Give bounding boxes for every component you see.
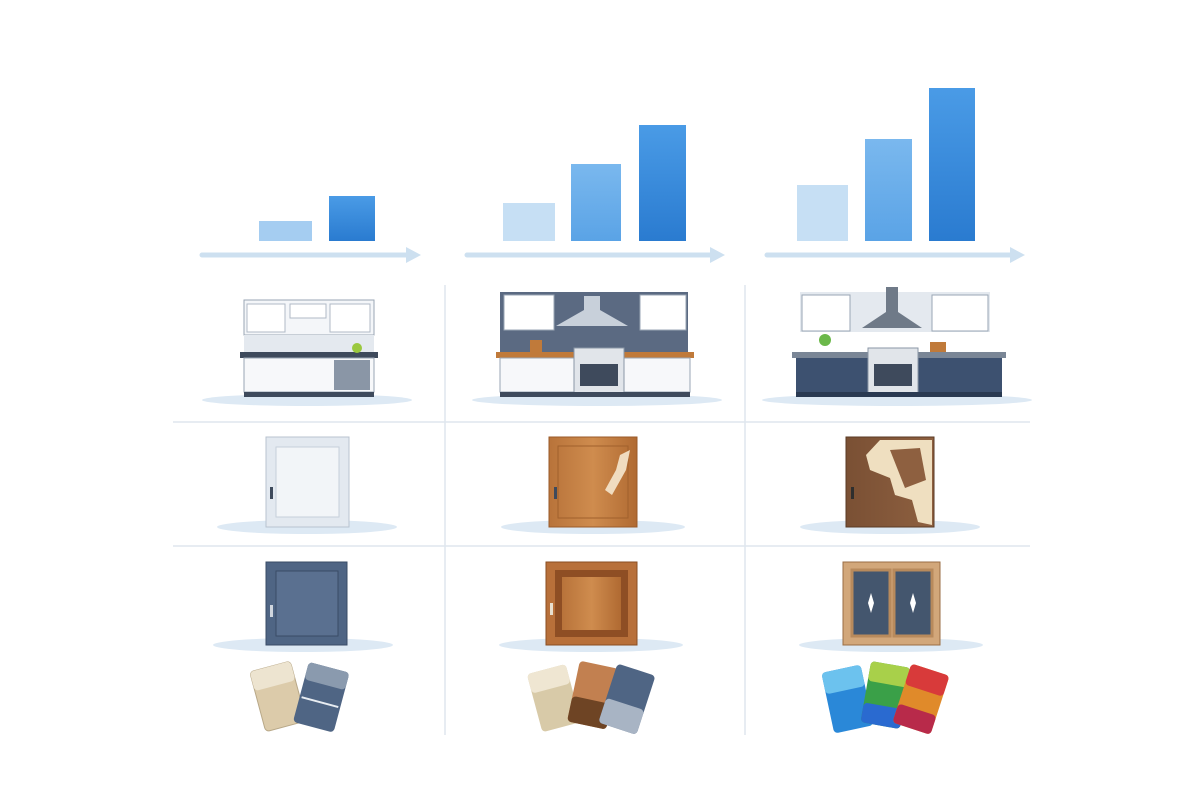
- door: wood cracked: [501, 437, 685, 534]
- bar chart: column 2: [467, 125, 725, 263]
- swatches: bright colors: [821, 661, 950, 735]
- bar chart: column 3: [767, 88, 1025, 263]
- bar chart: column 1: [202, 196, 421, 263]
- door: navy shaker: [213, 562, 393, 652]
- arrow: column 3: [767, 247, 1025, 263]
- door: glass cabinet: [799, 562, 983, 652]
- kitchen: wood counters: [472, 292, 722, 406]
- door: wood raised panel: [499, 562, 683, 652]
- kitchen: navy cabinets: [762, 287, 1032, 406]
- swatches: neutral/navy: [250, 661, 350, 733]
- arrow: column 1: [202, 247, 421, 263]
- door: peeling dark wood: [800, 437, 980, 534]
- arrow: column 2: [467, 247, 725, 263]
- kitchen: basic white: [202, 300, 412, 406]
- swatches: neutral/wood/navy: [527, 661, 656, 735]
- door: white flat: [217, 437, 397, 534]
